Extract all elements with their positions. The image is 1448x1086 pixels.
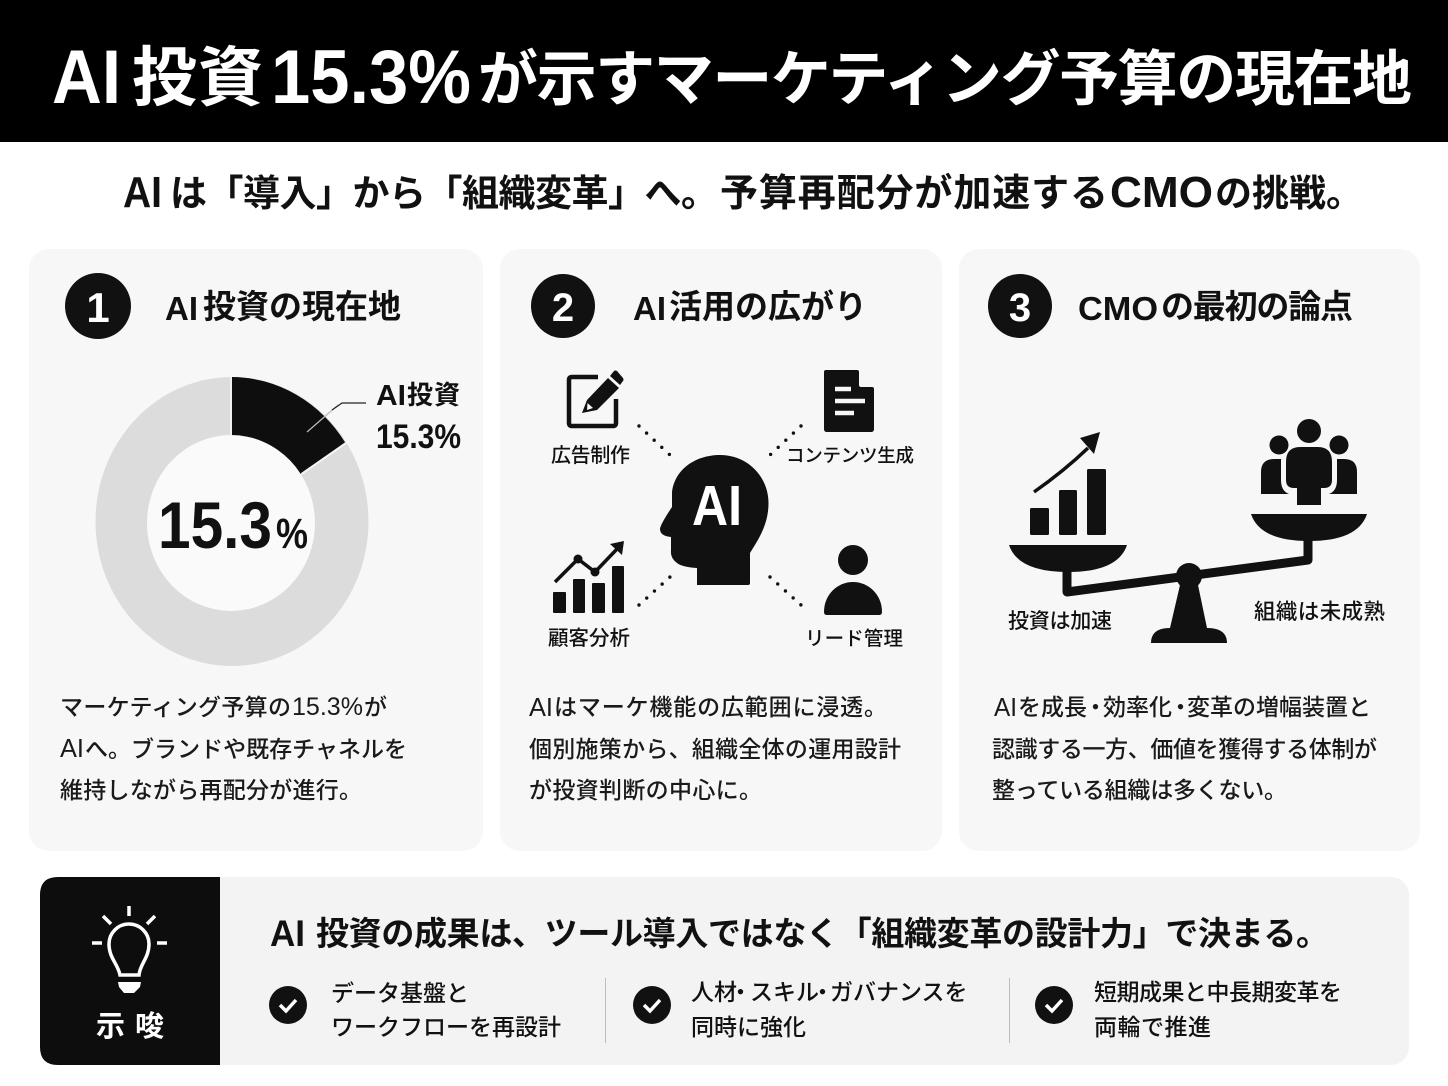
panel: implication band <box>40 877 1409 1065</box>
icon: growth bars <box>1030 432 1106 535</box>
title banner <box>0 0 1448 142</box>
icon: AI head: AI <box>692 474 742 538</box>
text block 1: が <box>364 694 387 720</box>
label: 投資は加速: 投資は加速 <box>1008 610 1112 633</box>
text block 2: はマーケ機能の広範囲に浸透。 <box>554 694 887 720</box>
icon: AI head <box>660 455 768 585</box>
icon: person <box>824 545 882 615</box>
scale beam <box>1067 538 1308 592</box>
text block 3: ・ <box>1169 694 1192 720</box>
text block 3: を成長 <box>1018 694 1087 720</box>
subtitle: は「導入」から「組織変革」へ。 <box>170 173 718 214</box>
point 2: 人材 <box>691 979 737 1005</box>
point 2: スキル <box>750 979 819 1005</box>
text block 1: マーケティング予算の <box>60 694 291 720</box>
title: 投資 <box>132 41 263 114</box>
subtitle: CMO <box>1110 168 1213 217</box>
donut label: 投資 <box>407 380 460 410</box>
text block 3: AI <box>994 692 1017 722</box>
donut chart: % <box>276 510 308 558</box>
implication headline: AI <box>270 913 305 954</box>
point 2: ・ <box>811 979 834 1005</box>
text block 3: 効率化 <box>1103 694 1172 720</box>
donut center value: 15.3 <box>158 488 272 562</box>
point 1: データ基盤と <box>331 980 469 1006</box>
text block 3 <box>992 692 1377 803</box>
title: 15.3% <box>271 35 471 120</box>
point 2: 同時に強化 <box>691 1014 806 1040</box>
panel: AI投資の現在地 <box>29 249 483 851</box>
point 1 <box>269 980 561 1040</box>
text block 1 <box>60 693 407 803</box>
subtitle: AI <box>123 168 162 217</box>
text block 2: AI <box>529 692 553 722</box>
point 2 <box>633 979 968 1040</box>
dotted connectors <box>639 426 801 605</box>
text block 3: 整っている組織は多くない。 <box>992 777 1287 803</box>
text block 1: 15.3% <box>292 693 363 721</box>
donut label: AI <box>376 380 406 412</box>
number badge 3: 3 <box>1009 286 1031 330</box>
text block 2: が投資判断の中心に。 <box>529 777 762 803</box>
heading 3: CMO <box>1078 290 1158 327</box>
panel: CMOの最初の論点 <box>959 249 1420 851</box>
donut label <box>376 380 461 456</box>
subtitle: 予算再配分が加速する <box>720 173 1108 215</box>
point 3 <box>1035 979 1342 1040</box>
point 2: ・ <box>729 979 752 1005</box>
implication label block <box>40 877 220 1065</box>
point 1: ワークフローを再設計 <box>331 1014 561 1040</box>
text block 1: へ。ブランドや既存チャネルを <box>85 736 407 762</box>
icon: edit pencil <box>569 370 624 426</box>
title: が示すマーケティング予算の現在地 <box>478 46 1412 113</box>
text block 1: 維持しながら再配分が進行。 <box>60 777 362 803</box>
label: コンテンツ生成: コンテンツ生成 <box>786 445 914 466</box>
text block 2 <box>529 692 901 803</box>
heading 3: の最初の論点 <box>1161 288 1353 325</box>
text block 2: 個別施策から、組織全体の運用設計 <box>529 736 901 762</box>
donut label: 15.3% <box>376 418 461 456</box>
point 3: 両輪で推進 <box>1094 1014 1211 1040</box>
number badge 2: 2 <box>552 286 574 330</box>
heading 3 <box>1078 288 1353 327</box>
icon: light bulb <box>92 906 167 993</box>
scale pans <box>1009 545 1127 572</box>
number badge 1: 1 <box>86 284 110 331</box>
heading 1: 投資の現在地 <box>203 288 401 325</box>
point 3: 短期成果と中長期変革を <box>1094 979 1342 1005</box>
text block 1: AI <box>60 733 84 763</box>
panel: AI活用の広がり <box>500 249 942 851</box>
number badge 1 <box>65 273 131 339</box>
icon: document <box>824 370 874 432</box>
heading 2: 活用の広がり <box>669 288 867 325</box>
balance scale illustration <box>1009 419 1367 643</box>
text block 3: 変革の増幅装置と <box>1187 694 1371 720</box>
implication headline: 投資の成果は、ツール導入ではなく「組織変革の設計力」で決まる。 <box>316 915 1329 952</box>
text block 3: 認識する一方、価値を獲得する体制が <box>992 736 1377 762</box>
label: 広告制作: 広告制作 <box>551 444 630 467</box>
subtitle: の挑戦。 <box>1215 173 1363 214</box>
donut chart <box>96 377 368 666</box>
icon: analysis chart <box>553 541 624 613</box>
label: 示唆: 示唆 <box>96 1010 164 1043</box>
heading 1: AI <box>165 290 198 327</box>
label: 顧客分析: 顧客分析 <box>548 627 630 650</box>
title: AI <box>52 35 121 120</box>
number badge 3 <box>988 274 1052 338</box>
subtitle <box>123 168 1363 217</box>
scale pivot and base <box>1151 585 1227 643</box>
text block 3: ・ <box>1084 694 1107 720</box>
label: リード管理: リード管理 <box>805 628 903 650</box>
icon: people group <box>1261 419 1357 505</box>
heading 2: AI <box>633 290 666 327</box>
point 2: ガバナンスを <box>830 979 968 1005</box>
label: 組織は未成熟: 組織は未成熟 <box>1254 600 1385 624</box>
number badge 2 <box>531 274 595 338</box>
title <box>52 35 1412 120</box>
